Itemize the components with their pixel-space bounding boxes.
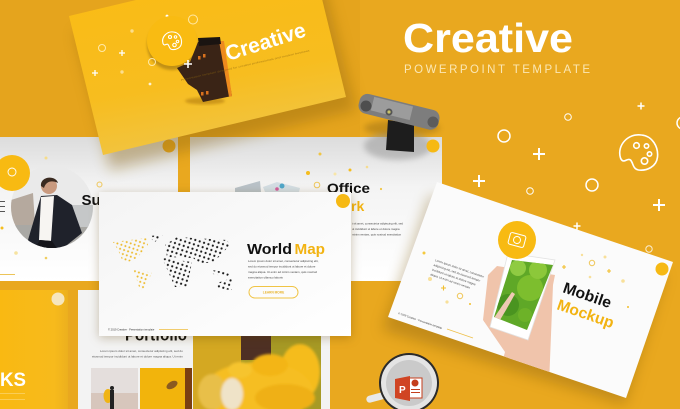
phone screen <box>494 260 553 330</box>
office body text <box>352 222 403 236</box>
heading: summary: Su <box>82 192 101 209</box>
slide: yellow works <box>0 290 68 409</box>
photo: bee on yellow <box>140 368 192 409</box>
card title: Creative: Creative <box>223 19 309 66</box>
mobile yellow circle with camera icon <box>498 221 536 259</box>
world map footer <box>108 328 188 332</box>
button: learn more: LEARN MORE <box>263 290 284 294</box>
world map paragraph: magna aliqua. Ut enim ad minim veniam, quis nostrud <box>248 270 317 274</box>
mobile hand and phone <box>483 256 556 372</box>
film roll <box>177 37 232 104</box>
title: Creative: Creative <box>403 15 573 61</box>
mug with PowerPoint logo <box>366 353 439 409</box>
mobile paragraph: adipiscing elit, sed do eiusmod tempor <box>433 263 481 283</box>
world map paragraph <box>248 259 319 280</box>
badge: mobile page number <box>656 262 668 276</box>
portfolio text: eiusmod tempor incididunt ut labore et dolore magna aliqua. Ut enim <box>92 354 183 358</box>
phone <box>490 253 555 340</box>
office body text: minim veniam, quis nostrud exercitation <box>352 232 402 236</box>
heading: mobile: Mobile <box>561 280 614 312</box>
heading: office: Office <box>327 180 370 196</box>
heading: work: rk <box>351 198 364 214</box>
card ring and plus over roll <box>148 58 192 68</box>
heading: works: KS <box>0 370 26 391</box>
heading: world map <box>247 241 325 258</box>
camera <box>357 92 441 152</box>
card decorations <box>92 15 198 85</box>
slide: mobile mockup <box>382 182 673 405</box>
office body text: ut incididunt ut labore et dolore magna <box>352 227 400 231</box>
photo: man in suit <box>11 178 93 248</box>
mobile paragraph: Lorem ipsum dolor sit amet, consectetur <box>435 258 485 279</box>
slide: office work <box>190 132 442 281</box>
badge: summary page number <box>162 140 176 152</box>
slide: portfolio <box>78 290 330 409</box>
heading: mockup: Mockup <box>555 297 616 332</box>
slide: summary <box>0 137 178 281</box>
summary decorations <box>0 156 102 259</box>
yellow card: Creative cover <box>69 0 356 170</box>
office decorations <box>306 152 382 190</box>
icon: powerpoint: P <box>399 385 406 396</box>
mobile footer: © 2019 Creative · Presentation template <box>398 311 443 330</box>
heading: world map: World <box>247 241 292 258</box>
card shadow <box>75 0 356 170</box>
world map paragraph: exercitation ullamco laboris <box>248 276 283 280</box>
americas <box>113 238 152 290</box>
office shadow of camera <box>364 132 432 160</box>
office screenshots <box>235 181 300 192</box>
mobile slide shadow <box>382 195 665 405</box>
mobile decorations <box>422 252 629 308</box>
heading: portfolio: Portfolio <box>125 326 187 344</box>
mobile paragraph <box>430 258 485 293</box>
office body text: t sit amet, consectetur adipiscing elit, sed <box>352 222 403 226</box>
slide: world map <box>99 192 351 336</box>
photo: man in yellow smoke <box>193 336 321 409</box>
portfolio text: Lorem ipsum dolor sit amet, consectetur adipiscing elit, sed do <box>100 349 183 353</box>
background rings and plus marks <box>473 102 680 252</box>
mobile paragraph: aliqua. Ut enim ad minim veniam <box>430 272 471 290</box>
card circle with palette icon <box>147 16 197 70</box>
world map footer: © 2019 Creative · Presentation template <box>108 328 155 332</box>
works text <box>0 393 25 400</box>
badge: works page number <box>52 292 64 306</box>
badge: office page number <box>426 140 440 152</box>
subtitle: PowerPoint template: POWERPOINT TEMPLATE <box>404 64 590 76</box>
heading: world map: Map <box>294 241 325 258</box>
badge: world map page number <box>336 194 350 208</box>
icon: summary yellow circle <box>0 155 30 191</box>
world map dots <box>113 235 232 290</box>
card subtitle: Presentation template designed for creative professionals and modern business <box>181 49 311 82</box>
world map paragraph: sed do eiusmod tempor incididunt ut labore et dolore <box>248 264 316 268</box>
world map paragraph: Lorem ipsum dolor sit amet, consectetur adipiscing elit, <box>248 259 319 263</box>
button: learn more <box>249 286 298 298</box>
mobile footer <box>398 311 473 338</box>
mobile paragraph: incididunt ut labore et dolore magna <box>431 268 477 286</box>
europe asia africa australia <box>148 235 232 290</box>
icon: palette <box>620 135 658 170</box>
portfolio text <box>92 349 183 358</box>
summary text lines <box>0 201 15 275</box>
photo: surfer on beach <box>91 368 138 409</box>
